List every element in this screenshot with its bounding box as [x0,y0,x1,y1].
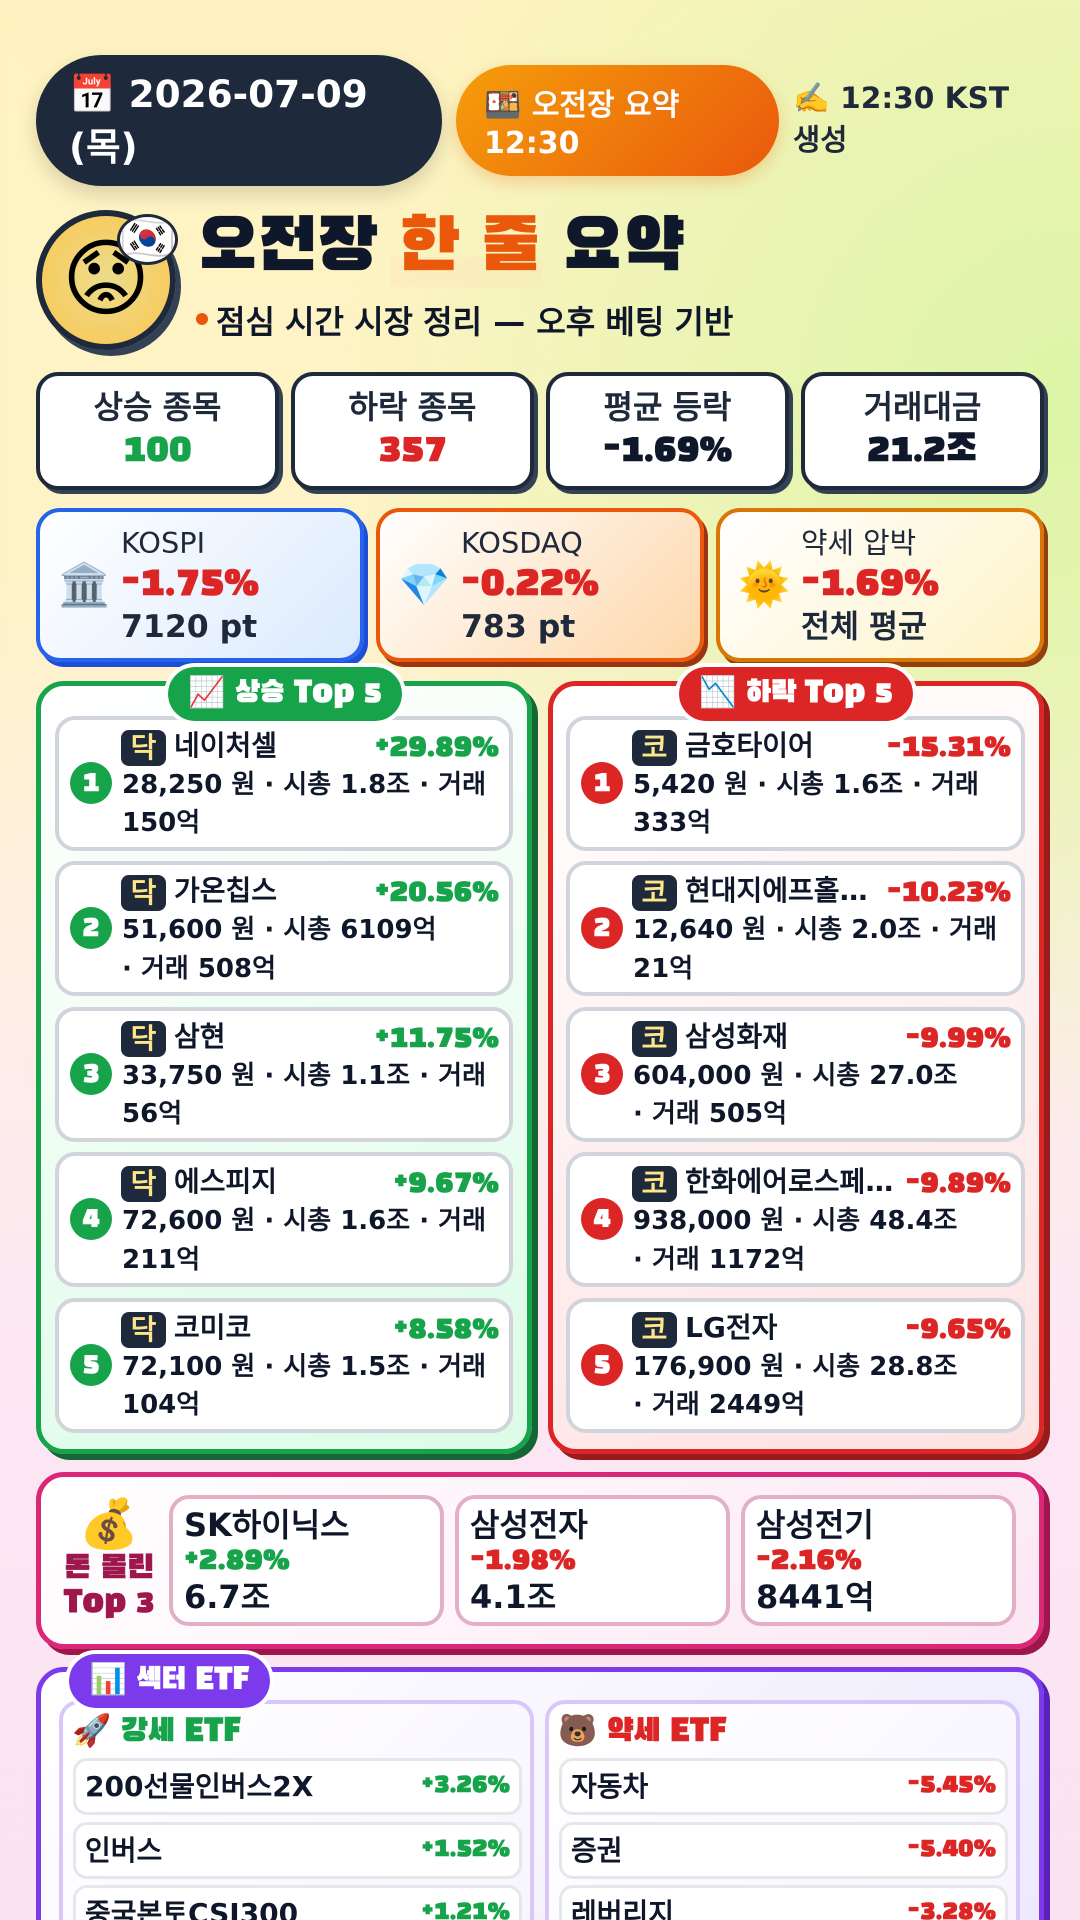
panel: rising top 5 [36,681,532,1454]
money card 1 [169,1495,444,1626]
strong row 1: +3.26% [421,1772,510,1798]
face circle [36,210,176,350]
money heading [64,1496,154,1619]
kpi: rising count: 상승 종목 [94,388,221,426]
money card 2: -1.98% [470,1545,576,1576]
money card 3: -2.16% [756,1545,862,1576]
panel: money top 3 [36,1472,1044,1649]
row 2: -10.23% [887,877,1011,908]
flag badge: 🇰🇷 [120,214,175,264]
row 3: 닥 [131,1022,156,1054]
index card: KOSPI: 7120 pt [121,609,257,645]
row 2: 가온칩스 [174,874,277,907]
kpi: falling count: 357 [378,431,447,469]
weak row 3 [559,1885,1008,1920]
weak row 2: -5.40% [907,1836,996,1862]
row 3 [55,1006,513,1142]
session pill: 12:30 [484,126,580,160]
row 3: 33,750 원 · 시총 1.1조 · 거래 [122,1060,486,1090]
money label: 돈 몰린 [64,1553,154,1585]
row 5: -9.65% [905,1314,1011,1344]
row 4: 938,000 원 · 시총 48.4조 [633,1206,957,1236]
weak row 1: 자동차 [571,1770,648,1803]
index card: KOSPI: KOSPI [121,526,205,560]
row 3: 3 [83,1060,99,1088]
row 5: 코 [642,1312,667,1346]
strong row 2: 인버스 [85,1834,162,1867]
row 5: 5 [594,1350,610,1378]
row 5: 176,900 원 · 시총 28.8조 [633,1352,957,1382]
row 5: LG전자 [685,1310,777,1344]
row 3: -9.99% [905,1022,1011,1054]
heading: sector ETF: 📊 섹터 ETF [90,1666,249,1696]
strong row 2 [73,1822,522,1879]
money card 2: 삼성전자 [470,1506,588,1544]
index card: weak pressure: -1.69% [801,563,939,604]
row 3: 604,000 원 · 시총 27.0조 [633,1060,957,1090]
row 1: 333억 [633,808,711,838]
row 1: 150억 [122,808,200,838]
row 4: 211억 [122,1244,200,1274]
money card 3 [741,1495,1016,1626]
panel: falling top 5 [548,681,1044,1454]
heading: sector ETF [65,1650,274,1712]
kpi: rising count: 100 [123,431,192,469]
money card 2 [455,1495,730,1626]
row 2 [566,861,1025,996]
row 1: 닥 [131,730,156,764]
index card: KOSPI: -1.75% [121,563,259,604]
row 1: 금호타이어 [685,728,814,762]
weak heading: 🐻 약세 ETF [558,1716,727,1748]
money card 1: +2.89% [184,1545,290,1576]
row 2: 현대지에프홀… [685,874,868,907]
row 5: 코미코 [174,1310,251,1344]
row 4 [55,1152,513,1287]
strong row 3 [73,1885,522,1920]
row 4: 4 [83,1205,99,1233]
row 1: +29.89% [375,732,499,762]
row 2 [55,861,513,996]
kpi: falling count: 하락 종목 [349,388,476,426]
index card: KOSDAQ: KOSDAQ [461,526,583,560]
weak ETF box [545,1700,1020,1920]
icon: money bag: 💰 [79,1496,139,1552]
heading: rising top 5 [164,663,406,725]
row 4 [566,1152,1025,1287]
row 1: -15.31% [887,732,1011,762]
row 1: 28,250 원 · 시총 1.8조 · 거래 [122,770,486,800]
row 4: 72,600 원 · 시총 1.6조 · 거래 [122,1206,486,1236]
strong heading: 🚀 강세 ETF [72,1716,241,1748]
row 5: 닥 [131,1312,156,1346]
kpi: turnover: 거래대금 [864,388,981,426]
row 3: · 거래 505억 [633,1099,787,1129]
row 3: +11.75% [375,1022,499,1054]
subtitle: 점심 시간 시장 정리 — 오후 베팅 기반 [216,303,733,341]
row 5: 72,100 원 · 시총 1.5조 · 거래 [122,1352,486,1382]
icon: mascot face with flag [36,210,181,356]
row 2: · 거래 508억 [122,954,276,984]
row 1: 5,420 원 · 시총 1.6조 · 거래 [633,770,979,800]
row 1: 코 [642,730,667,764]
row 1: 1 [594,768,610,796]
heading: falling top 5 [675,663,917,725]
money label: Top 3 [64,1588,154,1619]
row 5: 104억 [122,1390,200,1420]
weak row 1: -5.45% [907,1772,996,1798]
kpi: turnover [801,372,1044,490]
index card: weak pressure: 약세 압박 [801,526,916,560]
row 4: 닥 [131,1167,156,1200]
row 3: 삼성화재 [685,1020,788,1052]
row 2: 닥 [131,876,156,909]
row 5: · 거래 2449억 [633,1390,805,1420]
money card 3: 8441억 [756,1578,875,1616]
strong ETF box [59,1700,534,1920]
row 3: 56억 [122,1099,182,1129]
row 4: 에스피지 [174,1165,277,1198]
kpi: turnover: 21.2조 [867,431,978,469]
heading: falling top 5: 📉 하락 Top 5 [699,679,893,709]
row 2: 51,600 원 · 시총 6109억 [122,915,436,945]
weak row 2: 증권 [571,1834,623,1867]
row 2: 코 [642,876,667,909]
row 3: 3 [594,1060,610,1088]
heading: rising top 5: 📈 상승 Top 5 [188,679,382,709]
index card: KOSDAQ: 783 pt [461,609,575,645]
kpi: falling count [291,372,534,490]
strong row 1 [73,1758,522,1815]
kpi: average change: -1.69% [603,431,732,469]
index card: KOSPI: 🏛️ [58,560,110,609]
date pill: 📅 2026-07-09 [69,72,368,116]
kpi: average change [546,372,789,490]
money card 1: SK하이닉스 [184,1506,350,1544]
index card: KOSPI [36,508,364,662]
index card: weak pressure: 🌞 [738,560,790,609]
row 4: 4 [594,1205,610,1233]
row 2: 2 [83,914,99,942]
weak row 1 [559,1758,1008,1815]
row 1 [55,716,513,850]
generated time: ✍️ 12:30 KST [793,81,1009,115]
row 1: 1 [83,768,99,796]
date pill [36,55,442,186]
row 1 [566,716,1025,850]
index card: KOSDAQ [376,508,704,662]
session pill [456,65,779,176]
money label [64,1553,154,1619]
panel: sector ETF [36,1667,1044,1920]
row 4: 코 [642,1167,667,1200]
row 3 [566,1006,1025,1142]
row 4: 한화에어로스페… [685,1165,893,1198]
strong row 1: 200선물인버스2X [85,1770,313,1803]
session pill: 🍱 오전장 요약 [484,88,679,122]
face circle: 😟︎ [62,230,150,329]
generated time: 생성 [793,122,847,156]
row 3: 삼현 [174,1020,226,1052]
row 2: 12,640 원 · 시총 2.0조 · 거래 [633,915,997,945]
index card: KOSDAQ: -0.22% [461,563,599,604]
date pill: (목) [69,125,138,169]
money card 1: 6.7조 [184,1578,270,1616]
index card: weak pressure [716,508,1044,662]
money card 2: 4.1조 [470,1578,556,1616]
money card 3: 삼성전기 [756,1506,874,1544]
row 5 [566,1298,1025,1432]
index card: weak pressure: 전체 평균 [801,609,927,645]
row 5: +8.58% [393,1314,499,1344]
row 4: +9.67% [393,1168,499,1199]
row 3: 코 [642,1022,667,1054]
kpi: rising count [36,372,279,490]
row 2: +20.56% [375,877,499,908]
kpi: average change: 평균 등락 [604,388,731,426]
title: 오전장 한 줄 요약 [198,214,683,286]
row 2: 21억 [633,954,693,984]
generated time [793,81,1009,156]
row 4: · 거래 1172억 [633,1244,805,1274]
index card: KOSDAQ: 💎 [398,560,450,609]
row 4: -9.89% [905,1168,1011,1199]
weak row 2 [559,1822,1008,1879]
row 5 [55,1298,513,1432]
strong row 2: +1.52% [421,1836,510,1862]
row 5: 5 [83,1350,99,1378]
row 2: 2 [594,914,610,942]
row 1: 네이처셀 [174,728,277,762]
